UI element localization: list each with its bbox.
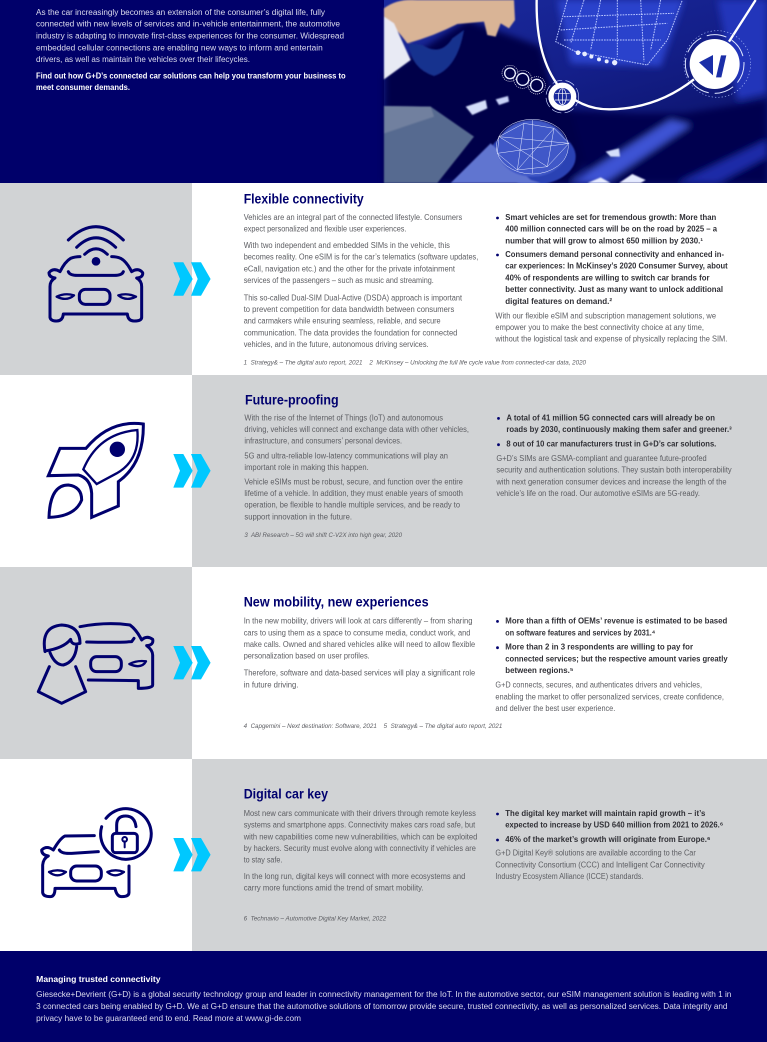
body text right: G+D connects, secures, and authenticates drivers and vehicles,: [495, 681, 702, 690]
body text left: important role in making this happen.: [244, 463, 369, 472]
body text right: [494, 311, 727, 344]
key facts: [496, 213, 728, 306]
network sphere: [496, 119, 569, 174]
body text right: empower you to make the best connectivity choice at any time,: [495, 323, 704, 332]
panel: digital car key: [0, 759, 767, 951]
icon: person and car: [38, 624, 153, 703]
panel: flexible connectivity: [0, 183, 767, 375]
body text right: enabling the market to offer personalized services, create confidence,: [495, 692, 724, 701]
body text right: G+D’s SIMs are GSMA-compliant and guarantee future-proofed: [496, 454, 707, 463]
panel: future-proofing: [0, 375, 767, 567]
footer text: privacy have to be guaranteed end to end. Read more at www.gi-de.com: [36, 1014, 301, 1023]
body text right: With our flexible eSIM and subscription management solutions, we: [495, 311, 717, 320]
body text right: Connectivity Consortium (CCC) and Intelligent Car Connectivity: [495, 860, 705, 869]
intro call to action: meet consumer demands.: [36, 83, 130, 92]
key facts: 8 out of 10 car manufacturers trust in G+D’s car solutions.: [506, 440, 716, 449]
intro call to action: [36, 72, 346, 92]
body text left: make calls. Owned and shared vehicles alike will need to allow flexible: [244, 640, 476, 649]
intro text: embedded cellular connections are enabling new ways to inform and entertain: [36, 43, 323, 52]
body text right: [495, 681, 724, 713]
body text left: lifetime of a vehicle. In addition, they must enable years of smooth: [244, 489, 463, 498]
body text right: and deliver the best user experience.: [495, 704, 615, 713]
intro text: industry is adapting to innovate first-class experiences for the consumer. Widespread: [36, 32, 344, 41]
footnote: 4 Capgemini – Next destination: Software, 2021 5 Strategy& – The digital auto report, 2021: [244, 724, 502, 730]
body text right: without the logistical task and expense of physically replacing the SIM.: [494, 335, 727, 344]
gear base: [489, 128, 576, 185]
icon: car with padlock: [42, 809, 151, 897]
header panel: [0, 0, 767, 185]
arrow: chevrons: [173, 454, 211, 488]
key facts: on software features and services by 2031.⁴: [505, 628, 655, 637]
arrow: chevrons: [173, 646, 211, 679]
icon row: [576, 50, 617, 65]
steering wheel: [409, 30, 464, 76]
body text left: services of the passengers – such as music and streaming.: [244, 276, 434, 285]
key facts: 400 million connected cars will be on the road by 2025 – a: [505, 225, 718, 234]
footnote: 3 ABI Research – 5G will shift C-V2X into high gear, 2020: [244, 533, 403, 539]
body text left: [244, 616, 476, 690]
body text left: operation, be flexible to handle multiple services, and be ready to: [244, 501, 461, 510]
body text left: [244, 213, 478, 349]
body text left: carry more functions amid the trend of smart mobility.: [244, 884, 424, 893]
key facts: The digital key market will maintain rapid growth – it’s: [505, 809, 706, 818]
buttons: [466, 100, 487, 115]
white arc: [537, 0, 756, 109]
header photo: car cockpit with digital overlays: [384, 0, 767, 185]
body text left: to stay safe.: [244, 856, 282, 865]
body text left: and carmakers while ensuring seamless, reliable, and secure: [244, 317, 441, 326]
body text left: by hackers. Security must evolve along with connectivity if vehicles are: [244, 844, 476, 853]
intro text: drivers, as well as maintain the vehicles over their lifecycles.: [36, 55, 250, 64]
icon: connected car with wifi: [49, 227, 143, 321]
sleeve: [384, 17, 411, 79]
footnote: 1 Strategy& – The digital auto report, 2021 2 McKinsey – Unlocking the full life cycle value from connected-car data, 2020: [244, 361, 587, 367]
body text left: in future driving.: [244, 681, 298, 690]
intro text: As the car increasingly becomes an extension of the consumer’s digital life, fully: [36, 8, 325, 17]
body text left: Therefore, software and data-based services will play a significant role: [244, 669, 476, 678]
body text left: [244, 413, 469, 522]
key facts: [497, 413, 732, 449]
body text right: G+D Digital Key® solutions are available according to the Car: [495, 849, 696, 858]
key facts: Consumers demand personal connectivity and enhanced in-: [505, 250, 724, 259]
body text left: This so-called Dual-SIM Dual-Active (DSDA) approach is important: [244, 293, 463, 302]
body text left: with new capabilities come new vulnerabilities, which can be exploited: [243, 832, 477, 841]
heading: Future-proofing: [245, 392, 339, 407]
key facts: More than a fifth of OEMs’ revenue is estimated to be based: [505, 616, 727, 625]
knee: [384, 106, 474, 183]
key facts: car experiences: In McKinsey’s 2020 Consumer Survey, about: [505, 262, 728, 271]
body text left: Vehicles are an integral part of the connected lifestyle. Consumers: [244, 213, 462, 222]
body text right: Industry Ecosystem Alliance (ICCE) standards.: [495, 872, 643, 881]
footer panel: [0, 951, 767, 1042]
footer text: 3 connected cars being enabled by G+D. We at G+D ensure that the automotive solutions of tomorrow provide secure, trusted connectivity, as well as personalized services. Data integrity and: [36, 1002, 727, 1011]
key facts: digital features on demand.²: [505, 297, 612, 306]
key facts: 40% of respondents are willing to switch car brands for: [505, 273, 710, 282]
body text left: eCall, navigation etc.) and the other for the private infotainment: [244, 264, 456, 273]
body text right: [495, 454, 732, 498]
body text left: In the long run, digital keys will connect with more ecosystems and: [244, 872, 465, 881]
body text left: becomes reality. One eSIM is for the car’s telematics (software updates,: [244, 253, 478, 262]
key facts: Smart vehicles are set for tremendous growth: More than: [505, 213, 716, 222]
body text left: communication. The data provides the foundation for connected: [244, 328, 457, 337]
footnote: 6 Technavio – Automotive Digital Key Market, 2022: [244, 916, 387, 922]
map screen: [556, 0, 682, 65]
key facts: better connectivity. Just as many want to unlock additional: [505, 285, 723, 294]
key facts: expected to increase by USD 640 million from 2021 to 2026.⁶: [505, 821, 724, 830]
body text right: [495, 849, 705, 881]
body text left: vehicles, and in the future, autonomous driving services.: [244, 340, 429, 349]
globe button: [551, 85, 574, 108]
body text left: 5G and ultra-reliable low-latency communications will play an: [244, 451, 448, 460]
key facts: A total of 41 million 5G connected cars will already be on: [506, 413, 715, 422]
footer text: [36, 990, 731, 1023]
body text left: expect personalized and flexible user experiences.: [244, 225, 406, 234]
body text left: cars to using them as a space to consume media, conduct work, and: [244, 628, 470, 637]
play button: [690, 39, 740, 89]
body text left: to prevent competition for data bandwidth between consumers: [244, 305, 454, 314]
body text left: driving, vehicles will connect and exchange data with other vehicles,: [244, 425, 469, 434]
footer heading: Managing trusted connectivity: [36, 975, 161, 984]
body text left: In the new mobility, drivers will look at cars differently – from sharing: [244, 616, 472, 625]
arrow: chevrons: [173, 838, 211, 871]
key facts: number that will grow to almost 650 million by 2030.¹: [505, 236, 703, 245]
body text left: Most new cars communicate with their drivers through remote keyless: [244, 809, 476, 818]
body text left: infrastructure, and consumers’ personal devices.: [244, 437, 402, 446]
heading: New mobility, new experiences: [244, 595, 429, 610]
panel: new mobility: [0, 567, 767, 759]
key facts: between regions.⁵: [505, 666, 574, 675]
key facts: More than 2 in 3 respondents are willing to pay for: [505, 643, 693, 652]
key facts: [496, 616, 728, 675]
key facts: 46% of the market’s growth will originate from Europe.⁶: [505, 835, 711, 844]
key facts: [496, 809, 724, 844]
body text left: Vehicle eSIMs must be robust, secure, and function over the entire: [244, 477, 463, 486]
key facts: connected services; but the respective amount varies greatly: [505, 654, 728, 663]
intro text: [36, 8, 344, 64]
intro call to action: Find out how G+D’s connected car solutions can help you transform your business to: [36, 72, 346, 81]
body text left: support innovation in the future.: [244, 513, 352, 522]
body text left: With the rise of the Internet of Things (IoT) and autonomous: [244, 413, 443, 422]
dash gauges: [505, 68, 543, 91]
heading: Digital car key: [244, 787, 328, 802]
body text right: security and authentication solutions. They sustain both interoperability: [496, 466, 732, 475]
body text left: personalization based on user profiles.: [244, 652, 370, 661]
body text right: vehicle’s life on the road. Our automotive eSIMs are 5G-ready.: [496, 489, 700, 498]
heading: Flexible connectivity: [244, 191, 364, 206]
icon: rocket: [48, 423, 143, 517]
arrow: chevrons: [173, 262, 211, 296]
hand: [384, 0, 515, 43]
body text left: With two independent and embedded SIMs in the vehicle, this: [244, 241, 450, 250]
key facts: roads by 2030, continuously making them safer and greener.³: [506, 425, 732, 434]
intro text: connected with new levels of services and in-vehicle entertainment, the automotive: [36, 20, 341, 29]
body text left: [243, 809, 477, 893]
footer text: Giesecke+Devrient (G+D) is a global security technology group and leader in connectivity management for the IoT. In the automotive sector, our eSIM management solution is leading with 1 in: [36, 990, 731, 999]
body text left: systems and smartphone apps. Connectivity makes cars road safe, but: [244, 821, 476, 830]
body text right: with next generation consumer devices and increase the length of the: [495, 477, 727, 486]
